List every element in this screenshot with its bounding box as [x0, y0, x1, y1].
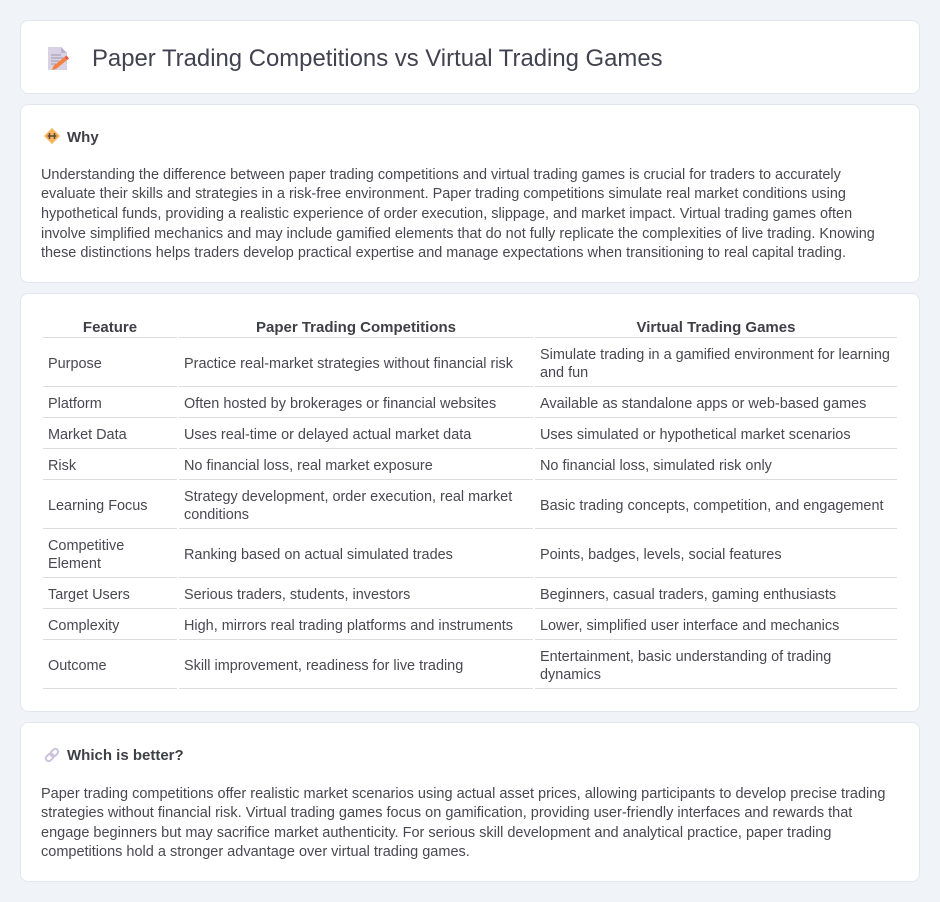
table header row: Virtual Trading Games [637, 319, 795, 336]
row: competitive element: Competitive [48, 538, 124, 554]
row: outcome: Skill improvement, readiness for live trading [184, 658, 463, 674]
why text block: Understanding the difference between paper trading competitions and virtual trading games is crucial for traders to accurately [41, 167, 841, 183]
panel: why [20, 104, 920, 283]
row: risk: Risk [48, 458, 76, 474]
row: outcome: dynamics [540, 667, 601, 683]
panel: title header [20, 20, 920, 94]
row: learning focus [48, 489, 884, 523]
row: risk: No financial loss, real market exposure [184, 458, 433, 474]
row: complexity: Complexity [48, 618, 119, 634]
why text block: involve simplified mechanics and may include gamified elements that do not fully replicate the complexities of live trading. Knowing [41, 226, 875, 242]
icon: memo with pencil [48, 47, 69, 70]
table header row: Paper Trading Competitions [256, 319, 456, 336]
row: target users: Beginners, casual traders, gaming enthusiasts [540, 587, 836, 603]
row: platform: Available as standalone apps or web-based games [540, 396, 866, 412]
table header row [83, 319, 795, 336]
row: market data: Uses real-time or delayed actual market data [184, 427, 471, 443]
title: Paper Trading Competitions vs Virtual Trading Games [92, 45, 663, 72]
row: risk [48, 458, 772, 474]
row: outcome: Entertainment, basic understanding of trading [540, 649, 831, 665]
row: learning focus: Basic trading concepts, competition, and engagement [540, 498, 884, 514]
row: purpose: Purpose [48, 356, 102, 372]
row: risk: No financial loss, simulated risk only [540, 458, 772, 474]
row: purpose [48, 347, 890, 381]
conclusion text block: Paper trading competitions offer realistic market scenarios using actual asset prices, allowing participants to develop precise trading [41, 786, 885, 802]
why text block [41, 167, 875, 261]
row: target users: Target Users [48, 587, 130, 603]
row: competitive element [48, 538, 782, 572]
why text block: these distinctions helps traders develop practical expertise and manage expectations when transitioning to real capital trading. [41, 245, 846, 261]
row: platform: Platform [48, 396, 102, 412]
row: learning focus: Learning Focus [48, 498, 148, 514]
row: platform: Often hosted by brokerages or financial websites [184, 396, 496, 412]
row: purpose: Simulate trading in a gamified environment for learning [540, 347, 890, 363]
row: complexity [48, 618, 839, 634]
icon: orange diamond sign [44, 128, 60, 144]
row: outcome [48, 649, 831, 683]
row: target users [48, 587, 836, 603]
conclusion text block: strategies without financial risk. Virtual trading games focus on gamification, providing user-friendly interfaces and rewards that [41, 805, 852, 821]
why text block: evaluate their skills and strategies in a risk-free environment. Paper trading competitions simulate real market conditions using [41, 186, 846, 202]
row: market data: Uses simulated or hypothetical market scenarios [540, 427, 851, 443]
row: competitive element: Ranking based on actual simulated trades [184, 547, 453, 563]
row: learning focus: Strategy development, order execution, real market [184, 489, 512, 505]
row: competitive element: Element [48, 556, 101, 572]
panel: which is better [20, 722, 920, 882]
heading: which is better: Which is better? [67, 747, 184, 764]
conclusion text block: engage beginners but may sacrifice market authenticity. For serious skill development and analytical practice, paper trading [41, 825, 831, 841]
panel: comparison table [20, 293, 920, 712]
row: market data: Market Data [48, 427, 127, 443]
row: target users: Serious traders, students, investors [184, 587, 410, 603]
row: competitive element: Points, badges, levels, social features [540, 547, 782, 563]
icon: chain link [44, 748, 60, 762]
row: market data [48, 427, 851, 443]
why text block: hypothetical funds, providing a realistic experience of order execution, slippage, and market impact. Virtual trading games often [41, 206, 852, 222]
conclusion text block: competitions hold a stronger advantage over virtual trading games. [41, 844, 470, 860]
heading: why: Why [67, 129, 99, 146]
row: learning focus: conditions [184, 507, 249, 523]
row: platform [48, 396, 866, 412]
row: outcome: Outcome [48, 658, 107, 674]
row: purpose: Practice real-market strategies without financial risk [184, 356, 513, 372]
conclusion text block [41, 786, 885, 860]
row: purpose: and fun [540, 365, 588, 381]
row: complexity: High, mirrors real trading platforms and instruments [184, 618, 513, 634]
row: complexity: Lower, simplified user interface and mechanics [540, 618, 839, 634]
table header row: Feature [83, 319, 137, 336]
